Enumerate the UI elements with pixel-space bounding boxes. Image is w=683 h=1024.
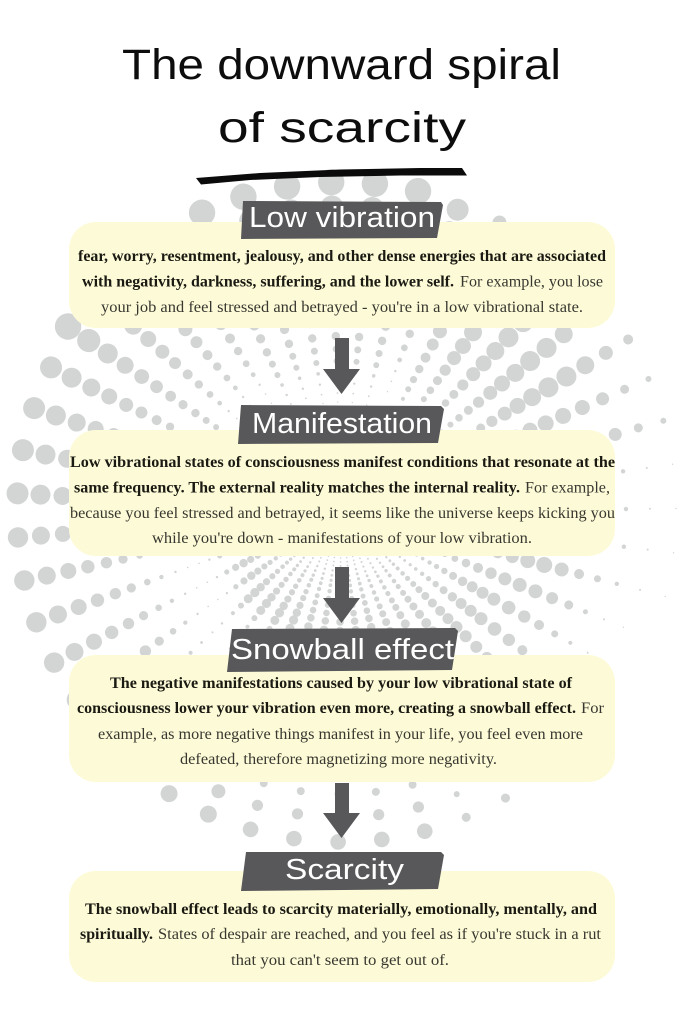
body text: spiritually. <box>80 926 153 943</box>
heading label: snowball effect: Snowball effect <box>231 634 454 666</box>
body text <box>70 454 615 547</box>
body text: with negativity, darkness, suffering, and the lower self. <box>82 274 454 290</box>
panel: manifestation <box>69 405 615 556</box>
body text: because you feel stressed and betrayed, it seems like the universe keeps kicking you <box>70 505 615 522</box>
body text: that you can't seem to get out of. <box>231 952 449 969</box>
heading label: low vibration: Low vibration <box>249 202 435 234</box>
body text: example, as more negative things manifest in your life, you feel even more <box>98 726 583 743</box>
body text: your job and feel stressed and betrayed - you're in a low vibrational state. <box>101 299 583 316</box>
body text <box>78 248 606 316</box>
body text <box>80 901 602 969</box>
body text: while you're down - manifestations of your low vibration. <box>152 530 532 547</box>
body text: fear, worry, resentment, jealousy, and other dense energies that are associated <box>78 248 606 265</box>
body text: Low vibrational states of consciousness manifest conditions that resonate at the <box>70 454 615 471</box>
panel background <box>69 655 615 782</box>
heading label: scarcity: Scarcity <box>285 854 405 886</box>
background dot spiral <box>6 169 677 850</box>
body text: The negative manifestations caused by your low vibrational state of <box>110 675 573 692</box>
body text: For <box>581 700 605 717</box>
heading label: snowball effect <box>227 628 458 672</box>
body text: For example, you lose <box>460 274 603 290</box>
arrow 2 <box>323 567 360 623</box>
panel background <box>69 871 615 982</box>
body text <box>77 675 605 768</box>
title: of scarcity <box>218 104 467 152</box>
heading label: manifestation <box>238 405 444 444</box>
title underline brush stroke <box>196 168 467 184</box>
panel: low vibration <box>69 201 615 328</box>
body text: consciousness lower your vibration even more, creating a snowball effect. <box>77 700 576 717</box>
body text: same frequency. The external reality matches the internal reality. <box>74 480 520 496</box>
title: The downward spiral <box>122 41 561 89</box>
panel background <box>69 222 615 328</box>
arrow 1 <box>323 338 360 394</box>
body text: defeated, therefore magnetizing more negativity. <box>180 751 497 768</box>
arrow 3 <box>323 783 360 838</box>
panel: scarcity <box>69 852 615 982</box>
body text: For example, <box>525 480 610 496</box>
body text: The snowball effect leads to scarcity materially, emotionally, mentally, and <box>85 901 597 918</box>
body text: States of despair are reached, and you feel as if you're stuck in a rut <box>158 926 602 943</box>
panel background <box>69 430 615 556</box>
heading label: manifestation: Manifestation <box>252 408 432 440</box>
heading label: scarcity <box>241 852 444 891</box>
panel: snowball effect <box>69 628 615 782</box>
title <box>122 41 561 152</box>
